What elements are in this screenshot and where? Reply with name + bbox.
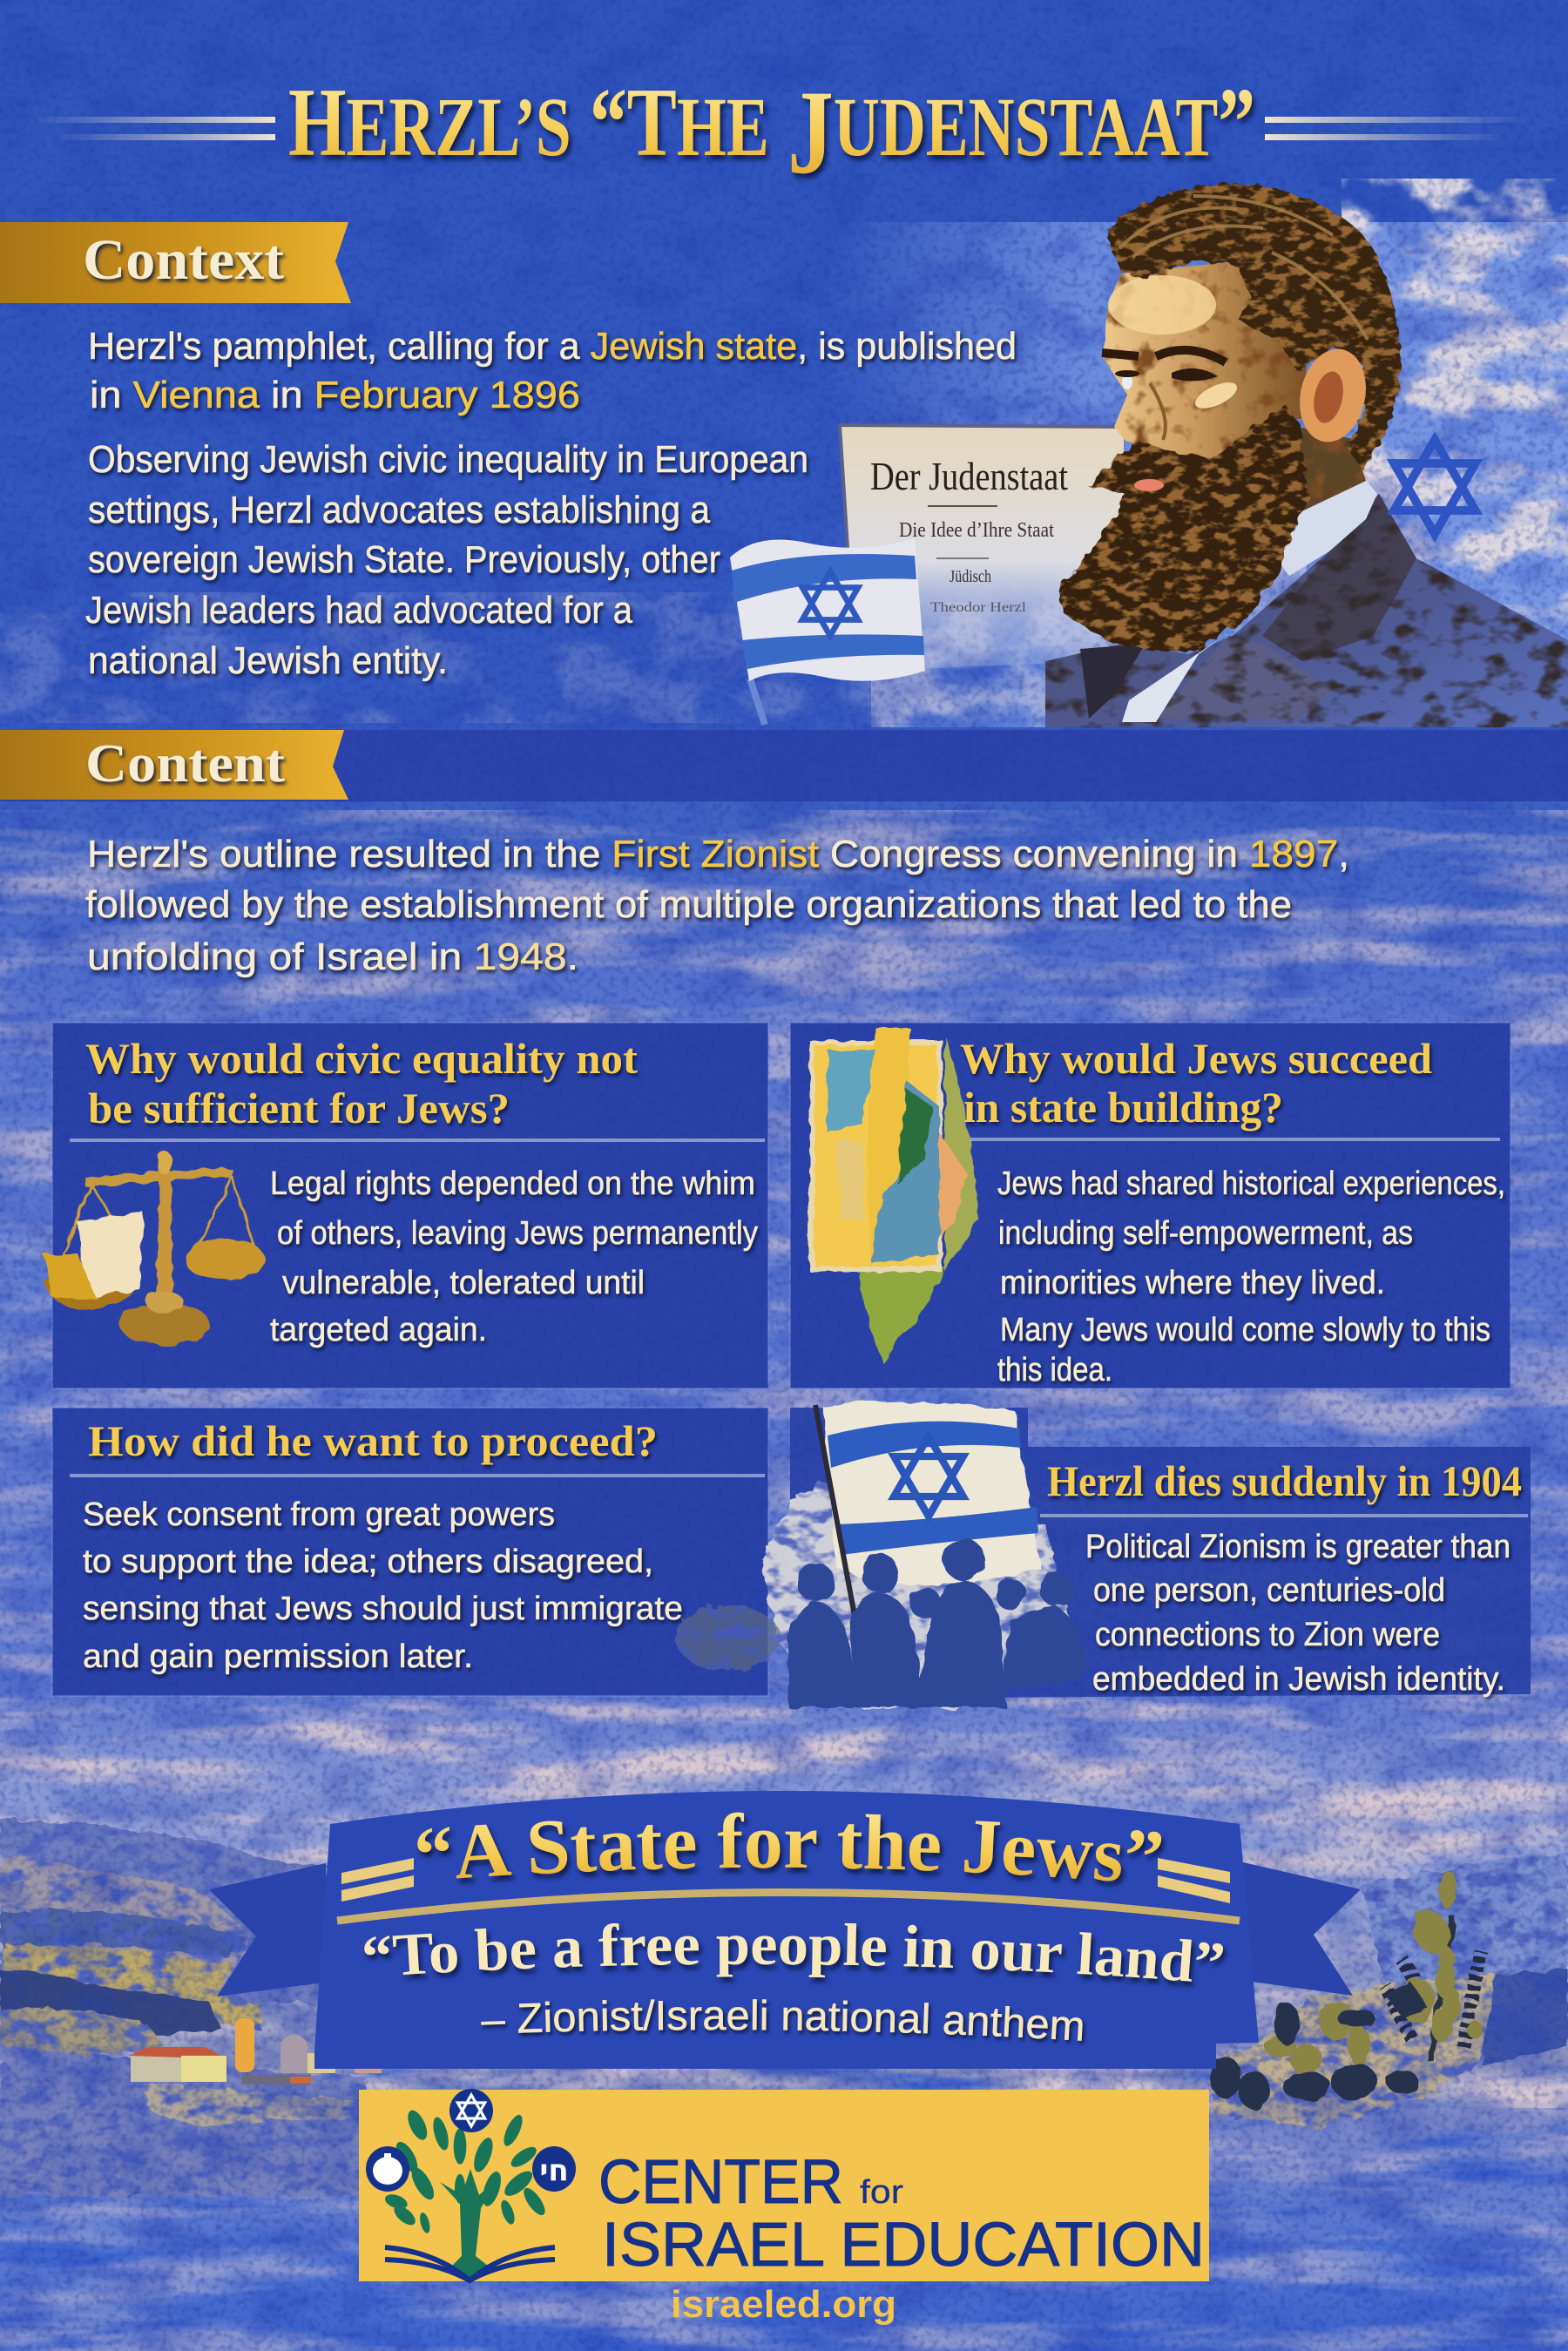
icon: chai medallion: חי bbox=[539, 2153, 569, 2188]
text: Jews had shared historical experiences, bbox=[997, 1165, 1505, 1202]
icon: small Israeli flag bbox=[730, 538, 925, 725]
jacket bbox=[1045, 494, 1568, 727]
document: Der Judenstaat pamphlet: Der Judenstaat bbox=[870, 454, 1068, 498]
panel: civic equality bbox=[44, 1034, 765, 1348]
decorative title rules bbox=[30, 117, 1531, 140]
text: to support the idea; others disagreed, bbox=[83, 1544, 653, 1580]
text: observing paragraph: Observing Jewish civic inequality in European bbox=[88, 438, 808, 481]
text: of others, leaving Jews permanently bbox=[277, 1215, 758, 1252]
text: observing paragraph: sovereign Jewish State. Previously, other bbox=[88, 538, 720, 581]
panel: dies background bbox=[790, 1408, 1531, 1699]
banner wings bbox=[209, 1861, 1361, 1996]
website url: israeled.org bbox=[671, 2283, 896, 2326]
people bbox=[788, 1538, 1085, 1707]
logo plate bbox=[359, 2090, 1209, 2281]
neck bbox=[1293, 427, 1376, 516]
icon: star of David bbox=[1394, 440, 1476, 534]
banner quote: “To be a free people in our land” bbox=[364, 1923, 1228, 1990]
text: vulnerable, tolerated until bbox=[282, 1265, 645, 1301]
nose shadow bbox=[1150, 383, 1166, 440]
panel: state building bbox=[812, 1028, 1505, 1388]
icon: pomegranate medallion bbox=[366, 2146, 409, 2192]
heading: Why would civic equality not bbox=[85, 1034, 638, 1083]
title: J bbox=[787, 65, 834, 199]
logo bbox=[359, 2089, 1209, 2281]
leaves bbox=[675, 1604, 780, 1671]
title: HERZL’S “THE bbox=[288, 69, 798, 177]
cheek highlight bbox=[1192, 377, 1240, 414]
text: one person, centuries-old bbox=[1093, 1572, 1445, 1609]
upper lapel bbox=[1262, 494, 1416, 661]
text: outline paragraph: unfolding of Israel in 1948. bbox=[87, 936, 578, 978]
banner body bbox=[314, 1791, 1259, 2069]
text: observing paragraph: national Jewish entity. bbox=[88, 639, 448, 682]
text: Many Jews would come slowly to this bbox=[1000, 1312, 1490, 1348]
text bbox=[1085, 1529, 1511, 1698]
wordmark: for bbox=[860, 2174, 903, 2211]
pole bbox=[815, 1405, 855, 1620]
panel: proceed background bbox=[52, 1408, 768, 1696]
panel: context bbox=[0, 184, 1568, 727]
beard bbox=[1058, 405, 1309, 654]
collar bbox=[1279, 480, 1377, 576]
panel: civic equality background bbox=[52, 1023, 768, 1388]
text bbox=[83, 1496, 683, 1675]
icon: map of Israel bbox=[812, 1028, 977, 1366]
heading bbox=[85, 1034, 638, 1132]
brow and eyes bbox=[1102, 350, 1226, 389]
hair strands bbox=[1119, 196, 1368, 340]
text: Legal rights depended on the whim bbox=[270, 1165, 755, 1202]
text: sensing that Jews should just immigrate bbox=[83, 1591, 683, 1627]
text: pamphlet summary: in Vienna in February 1896 bbox=[90, 374, 580, 416]
heading: Why would Jews succeed bbox=[960, 1034, 1432, 1083]
landscape left hills bbox=[0, 1821, 366, 2195]
text: including self-empowerment, as bbox=[998, 1215, 1413, 1252]
text: observing paragraph: Jewish leaders had advocated for a bbox=[85, 589, 632, 632]
text bbox=[997, 1165, 1505, 1388]
heading: How did he want to proceed? bbox=[88, 1416, 658, 1465]
illustration: village bbox=[129, 2018, 382, 2084]
band: content section header bbox=[0, 730, 1568, 801]
text: observing paragraph bbox=[85, 438, 808, 682]
text: outline paragraph: followed by the establishment of multiple organizations that led to the bbox=[85, 883, 1292, 926]
text: embedded in Jewish identity. bbox=[1092, 1661, 1505, 1698]
text: pamphlet summary: Herzl's pamphlet, calling for a Jewish state, is published bbox=[88, 325, 1017, 368]
gold arc rule bbox=[337, 1892, 1240, 1921]
text bbox=[270, 1165, 758, 1348]
heading: be sufficient for Jews? bbox=[88, 1084, 510, 1132]
lip bbox=[1134, 479, 1164, 491]
text: minorities where they lived. bbox=[1000, 1265, 1385, 1301]
text: Seek consent from great powers bbox=[83, 1496, 555, 1533]
ear bbox=[1292, 342, 1374, 449]
ribbon: context bbox=[0, 222, 351, 303]
banner heading: “A State for the Jews” bbox=[416, 1812, 1167, 1888]
wordmark: ISRAEL EDUCATION bbox=[602, 2211, 1205, 2280]
heading: in state building? bbox=[963, 1083, 1283, 1132]
hair bbox=[1107, 184, 1401, 470]
illustration: olive bushes bbox=[1210, 1871, 1483, 2110]
icon: balance scales bbox=[44, 1151, 265, 1345]
icon: chai medallion bbox=[532, 2146, 576, 2192]
text: Political Zionism is greater than bbox=[1085, 1529, 1511, 1565]
banner attribution: – Zionist/Israeli national anthem bbox=[481, 1999, 1087, 2045]
landscape right hills bbox=[1211, 1853, 1568, 2128]
heading bbox=[960, 1034, 1432, 1132]
text: this idea. bbox=[997, 1352, 1112, 1388]
text: outline paragraph: Herzl's outline resulted in the First Zionist Congress convening in 1897, bbox=[87, 833, 1349, 875]
tie bbox=[1080, 644, 1146, 719]
text: and gain permission later. bbox=[83, 1638, 473, 1675]
lower lapel bbox=[1156, 636, 1333, 719]
title: ” bbox=[1218, 69, 1267, 177]
tree bbox=[383, 2107, 549, 2280]
forehead highlight bbox=[1108, 275, 1216, 334]
panel: proceed bbox=[70, 1416, 765, 1675]
document: Der Judenstaat pamphlet: Theodor Herzl bbox=[930, 600, 1027, 615]
document: Der Judenstaat pamphlet: Jüdisch bbox=[950, 567, 991, 586]
flag bbox=[823, 1402, 1040, 1585]
icon: star medallion bbox=[449, 2089, 493, 2132]
open book bbox=[385, 2247, 555, 2280]
wordmark bbox=[598, 2148, 1205, 2280]
wordmark: CENTER bbox=[598, 2148, 843, 2217]
heading: Herzl dies suddenly in 1904 bbox=[1047, 1456, 1522, 1505]
label: content: Content bbox=[85, 734, 285, 794]
panel: Herzl dies bbox=[675, 1402, 1528, 1707]
heading side rules bbox=[341, 1858, 1230, 1903]
face bbox=[1102, 261, 1307, 462]
document: Der Judenstaat pamphlet bbox=[840, 425, 1124, 671]
text: observing paragraph: settings, Herzl advocates establishing a bbox=[88, 489, 710, 531]
title: UDENSTAAT bbox=[834, 80, 1218, 173]
portrait: Theodor Herzl bbox=[1045, 184, 1568, 727]
label: context: Context bbox=[83, 228, 284, 292]
text: targeted again. bbox=[270, 1312, 487, 1348]
banner bbox=[209, 1791, 1361, 2069]
illustration: flag and crowd bbox=[675, 1402, 1085, 1707]
text: pamphlet summary bbox=[88, 325, 1017, 416]
panel: state building background bbox=[790, 1023, 1511, 1388]
shirt bbox=[1122, 632, 1229, 722]
text: connections to Zion were bbox=[1095, 1617, 1440, 1653]
text: outline paragraph bbox=[85, 833, 1349, 978]
panel: content bbox=[0, 730, 1349, 978]
document: Der Judenstaat pamphlet: Die Idee d’Ihre Staat bbox=[899, 519, 1054, 542]
ribbon: content bbox=[0, 730, 348, 800]
backdrop bbox=[762, 1481, 1080, 1707]
